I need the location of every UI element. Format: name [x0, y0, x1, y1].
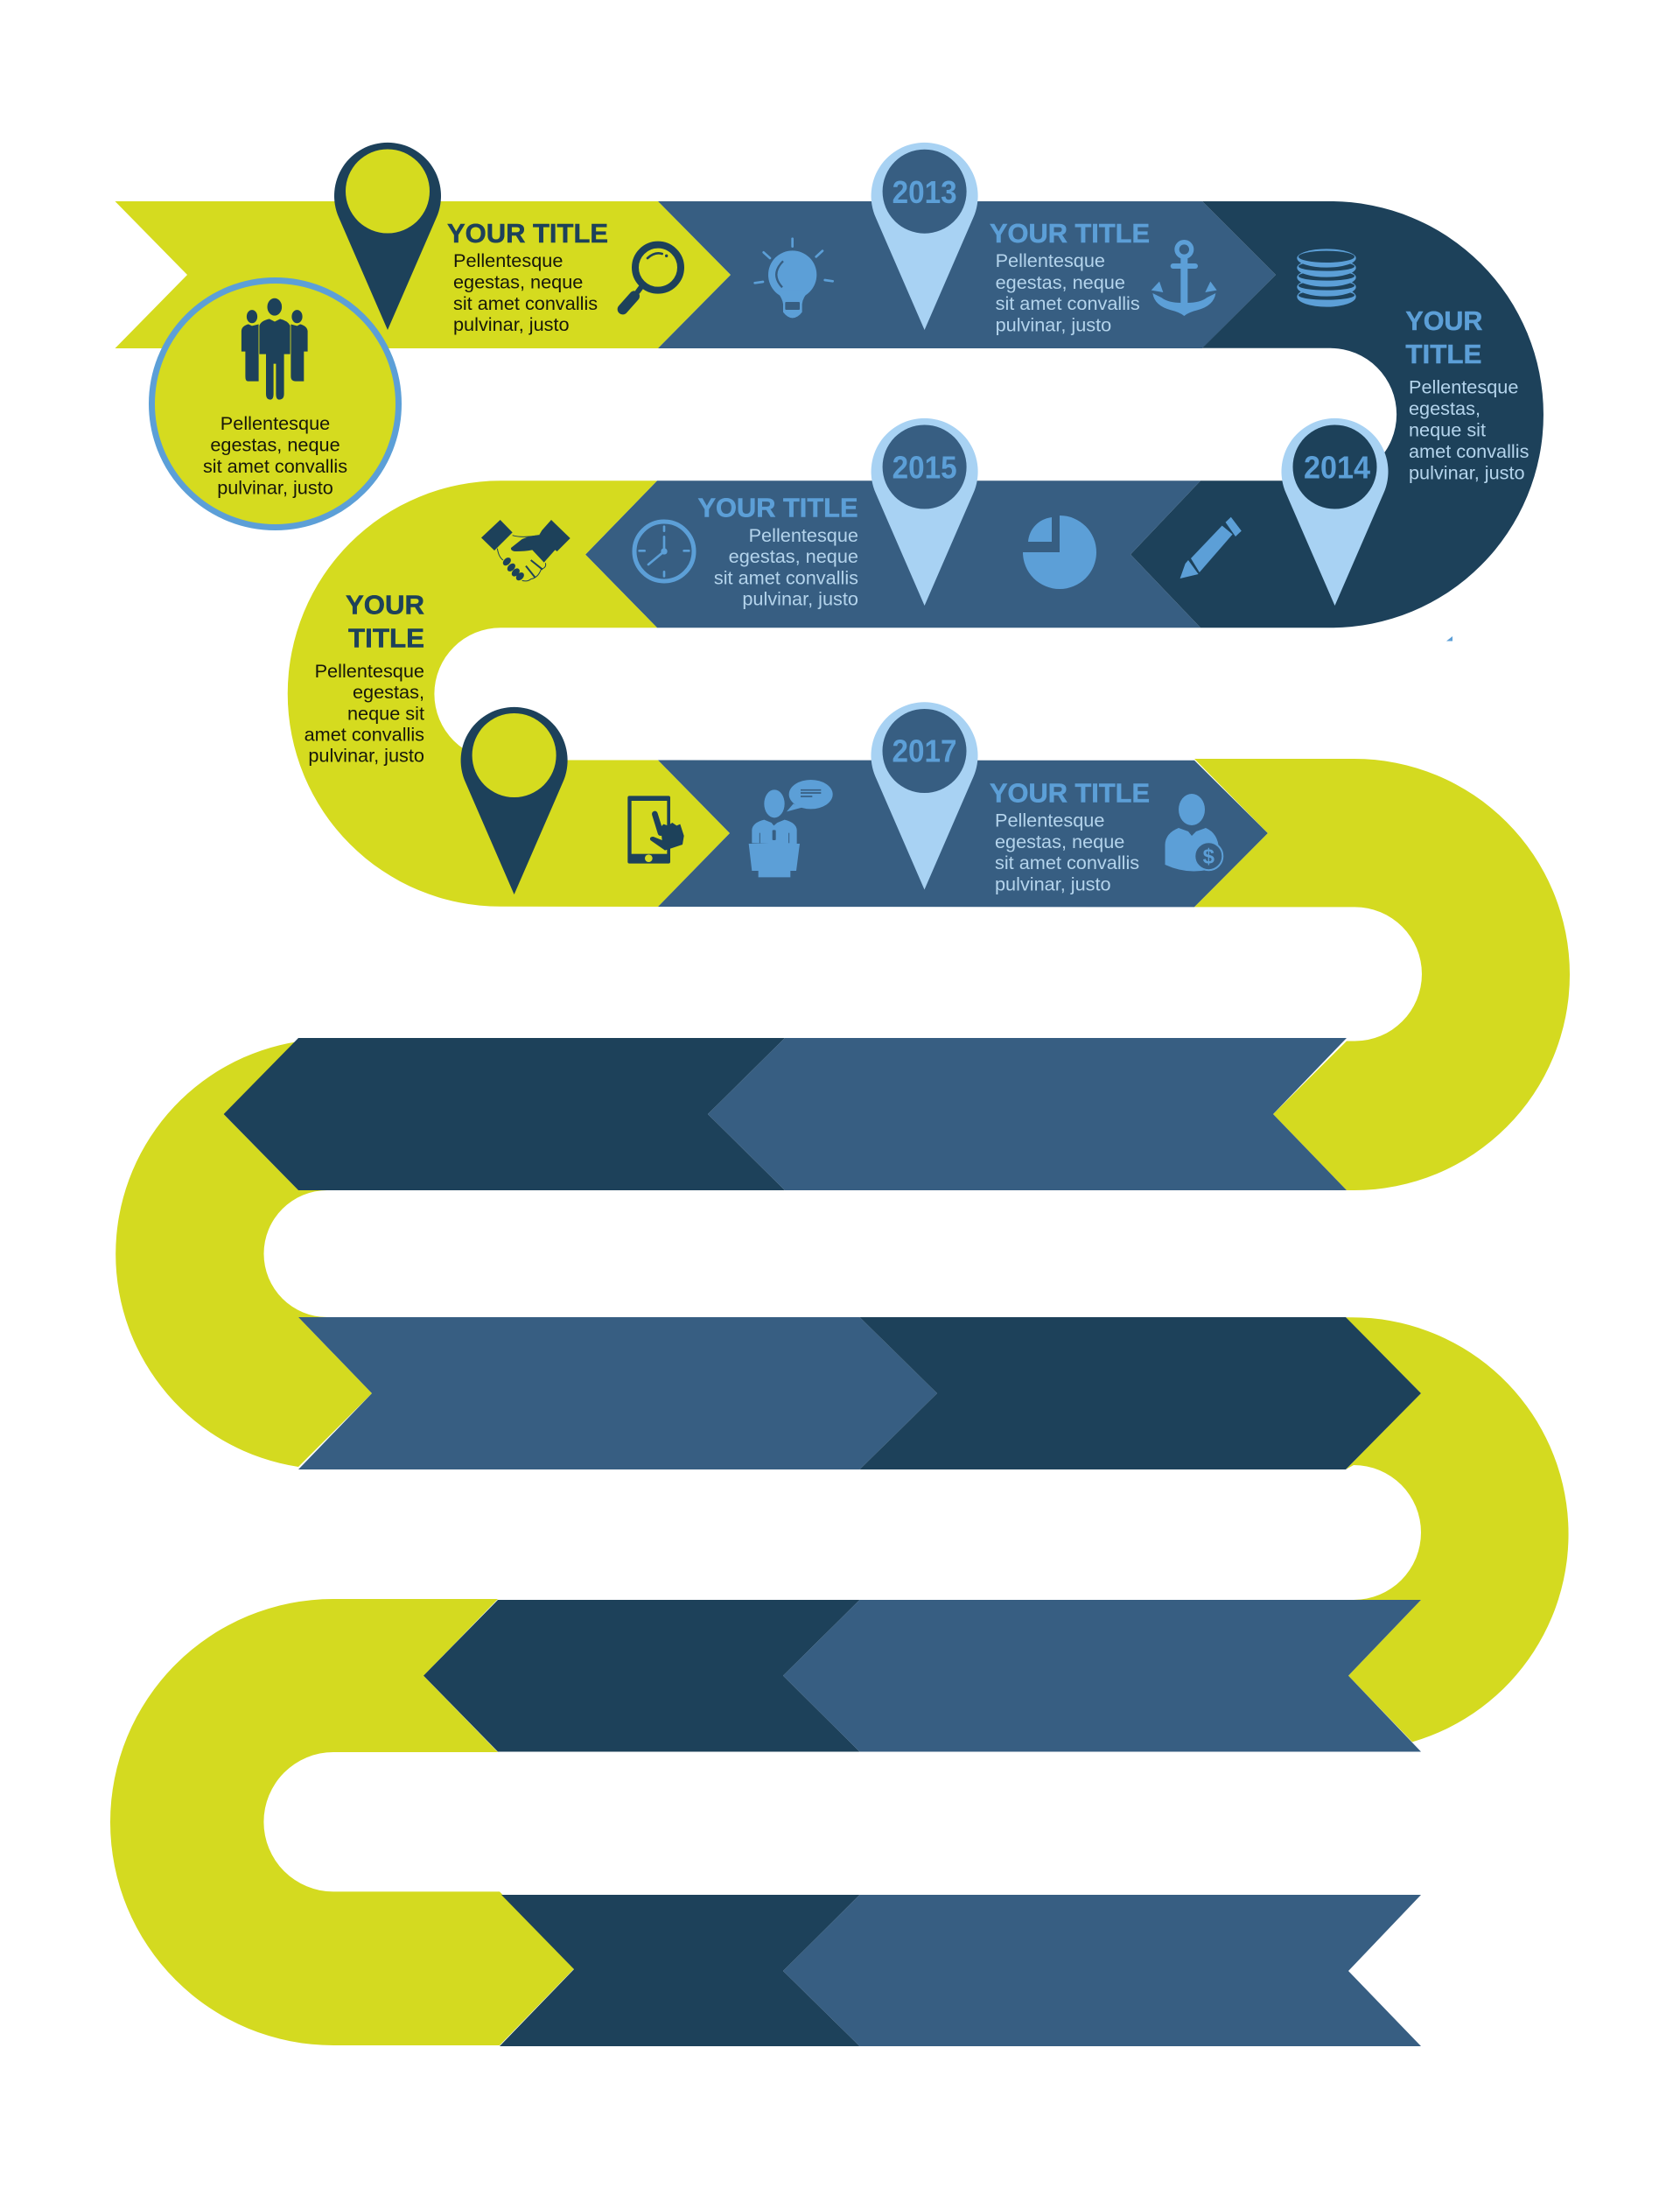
road: lime bottom-left curve — [110, 1599, 574, 2045]
text block: right curve: amet convallis — [1409, 440, 1530, 462]
road: navy sixth row segment — [424, 1600, 859, 1752]
text block: 2015: Pellentesque — [749, 524, 858, 546]
icon: light bulb — [755, 239, 833, 318]
pin: 2013: 2013 — [892, 174, 957, 210]
callout circle: team — [152, 280, 399, 527]
text block: 2015: pulvinar, justo — [742, 588, 858, 609]
text block: left curve — [304, 590, 424, 767]
road: third mid-blue segment — [658, 760, 1268, 907]
road: mid-blue seventh row end — [783, 1895, 1421, 2046]
text block: 2013: egestas, neque — [996, 271, 1125, 293]
road: navy fourth row segment — [224, 1038, 785, 1190]
text: circle body: sit amet convallis — [203, 455, 347, 477]
text block: 2017: egestas, neque — [995, 831, 1124, 852]
text block: 2015 — [698, 493, 858, 609]
text block: 2013 — [990, 218, 1150, 335]
text block: first lime segment: sit amet convallis — [453, 292, 598, 314]
text: circle body: Pellentesque — [220, 412, 330, 434]
icon: handshake — [481, 520, 570, 582]
icon: man with dollar coin: $ — [1203, 845, 1215, 868]
text block: right curve: TITLE — [1405, 339, 1481, 369]
road: lime right curve, lower — [1346, 1317, 1569, 1742]
road: mid-blue fifth row segment — [298, 1317, 937, 1469]
road: second mid-blue segment — [585, 480, 1200, 628]
text block: right curve: pulvinar, justo — [1409, 461, 1525, 483]
text block: 2013: YOUR TITLE — [990, 218, 1150, 249]
pin: 2014 — [1281, 418, 1389, 606]
text block: 2015: egestas, neque — [729, 545, 858, 567]
text block: 2017: YOUR TITLE — [990, 778, 1150, 809]
text block: 2017: pulvinar, justo — [995, 873, 1111, 895]
text block: 2017: sit amet convallis — [995, 852, 1139, 873]
icon: anchor — [1152, 242, 1217, 316]
text: circle body: pulvinar, justo — [217, 476, 333, 498]
text block: right curve: Pellentesque — [1409, 376, 1518, 398]
text block: 2015: YOUR TITLE — [698, 493, 858, 523]
text block: first lime segment: YOUR TITLE — [447, 218, 608, 249]
text: circle body: egestas, neque — [210, 434, 340, 456]
text block: left curve: YOUR — [346, 590, 424, 620]
icon: man with dollar coin — [1166, 794, 1222, 872]
road: navy seventh row segment — [500, 1895, 859, 2046]
text block: left curve: neque sit — [347, 702, 424, 724]
text block: left curve: egestas, — [353, 681, 424, 703]
text block: first lime segment: egestas, neque — [453, 270, 583, 292]
text block: right curve: neque sit — [1409, 419, 1486, 441]
road: navy right curve — [1130, 201, 1544, 628]
icon: speaker at podium — [749, 780, 833, 877]
road: mid-blue fourth row segment — [708, 1038, 1347, 1190]
text block: 2015: sit amet convallis — [714, 566, 858, 588]
icon: tablet with pointing hand — [627, 796, 684, 864]
icon: coin stack — [1297, 249, 1356, 307]
text block: 2017 — [990, 778, 1150, 895]
icon: pie chart — [1023, 515, 1096, 589]
text: circle body — [203, 412, 347, 498]
text block: right curve — [1405, 305, 1530, 483]
small stray triangle — [1446, 636, 1452, 641]
pin: 2015 — [872, 418, 978, 606]
road: mid-blue sixth row segment — [783, 1600, 1421, 1752]
road: lime left curve — [288, 480, 730, 907]
road: lime left curve, lower — [116, 1041, 372, 1467]
text block: 2013: Pellentesque — [996, 249, 1105, 271]
text block: 2013: pulvinar, justo — [996, 313, 1111, 335]
text block: first lime segment: Pellentesque — [453, 249, 563, 271]
icon: three people — [242, 298, 308, 400]
text block: right curve: egestas, — [1409, 397, 1480, 419]
icon: clock — [634, 522, 694, 581]
text block: first lime segment — [447, 218, 608, 335]
road: lime start segment — [116, 201, 731, 348]
text block: 2017: Pellentesque — [995, 810, 1104, 831]
text block: first lime segment: pulvinar, justo — [453, 313, 570, 335]
road: navy fifth row segment — [859, 1317, 1421, 1469]
road: lime right curve — [1194, 759, 1570, 1190]
pin: 2014: 2014 — [1304, 450, 1370, 485]
text block: left curve: TITLE — [348, 622, 424, 653]
winding road — [110, 201, 1570, 2046]
pin: 2015: 2015 — [892, 450, 957, 485]
text block: left curve: pulvinar, justo — [308, 744, 424, 767]
pin: 2013 — [872, 143, 978, 330]
text block: 2013: sit amet convallis — [996, 292, 1140, 314]
road: first mid-blue segment — [658, 201, 1276, 348]
text block: right curve: YOUR — [1405, 305, 1482, 336]
pin: lime lower — [461, 707, 568, 894]
icon: magnifier — [623, 245, 681, 309]
pin: lime top — [334, 143, 441, 330]
pin: 2017 — [872, 702, 978, 889]
text block: left curve: amet convallis — [304, 723, 424, 745]
text block: left curve: Pellentesque — [315, 660, 424, 682]
pin: 2017: 2017 — [892, 733, 957, 769]
icon: pencil — [1180, 517, 1242, 579]
